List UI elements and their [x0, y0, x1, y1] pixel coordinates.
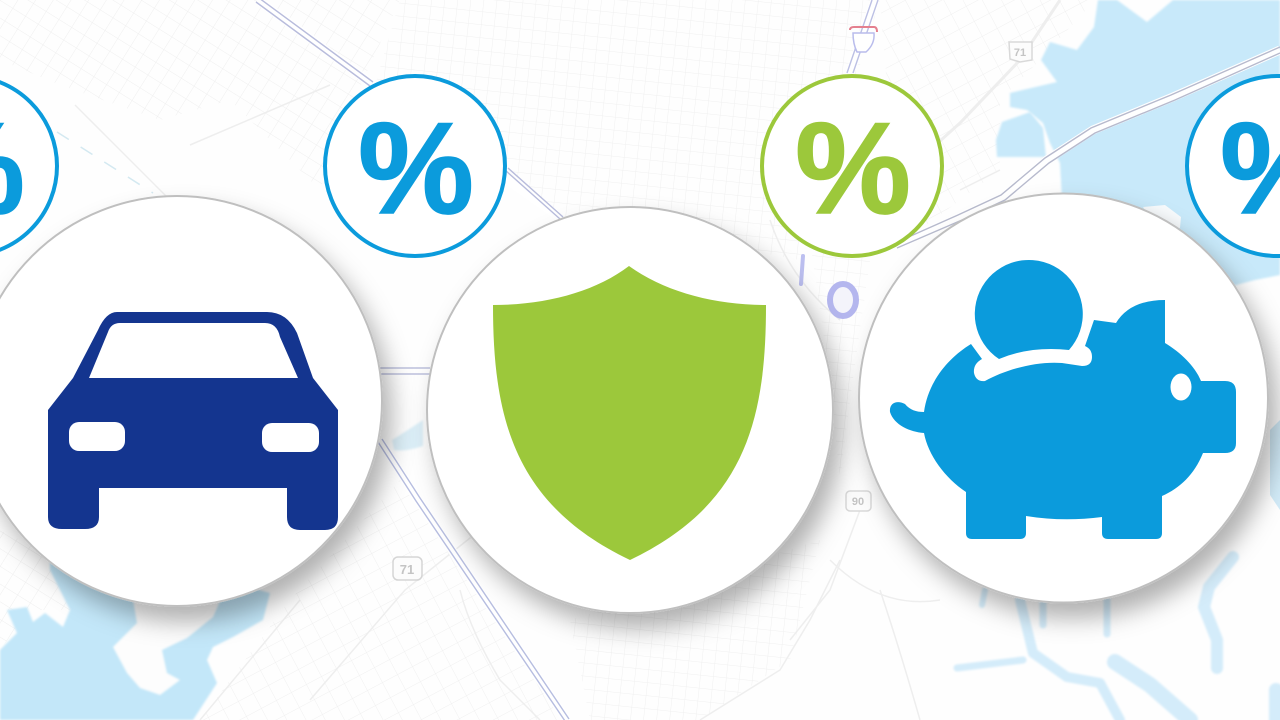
map land: peninsula: [113, 590, 225, 695]
piggy bank circle: [859, 194, 1268, 602]
dashed ferry line: [57, 132, 153, 193]
map marker: interchange ring: [830, 284, 856, 316]
shield circle: [427, 207, 833, 613]
icon: shield: [493, 266, 766, 560]
map minor roads: [75, 0, 1060, 720]
map water: small lake between circles: [392, 420, 423, 450]
map land: island by piggy circle: [1143, 205, 1181, 228]
map water: inner lake: [996, 112, 1046, 157]
map marker: route sign center: [846, 491, 871, 511]
map marker: route sign bottom left: [393, 557, 422, 580]
percent badge: far right: [1187, 76, 1280, 256]
piggy eye: [1170, 374, 1192, 400]
map water: top right bay: [1010, 0, 1280, 300]
percent badge: blue: %: [358, 95, 474, 241]
percent badge: far left: [0, 76, 57, 256]
map marker: route sign right: [1009, 42, 1032, 62]
icon: car: [48, 312, 338, 530]
percent badge: blue: [325, 76, 505, 256]
map water: bottom left bay: [0, 540, 270, 720]
piggy coin: [975, 260, 1083, 359]
map marker: route sign center: 90: [852, 496, 864, 508]
map highways: [256, 0, 1280, 720]
icon: piggy bank: [890, 260, 1236, 539]
piggy body: [890, 300, 1236, 539]
car circle: [0, 196, 382, 606]
percent badge: green: %: [795, 95, 911, 241]
map water: bottom right streams: [957, 557, 1276, 720]
map marker: route sign right: 71: [1014, 47, 1026, 59]
map water: right edge patch: [1270, 420, 1280, 510]
map marker: route sign top: [850, 27, 877, 52]
percent badge: green: [762, 76, 942, 256]
map marker: interchange left: [801, 256, 803, 284]
map marker: route sign bottom left: 71: [400, 562, 414, 577]
